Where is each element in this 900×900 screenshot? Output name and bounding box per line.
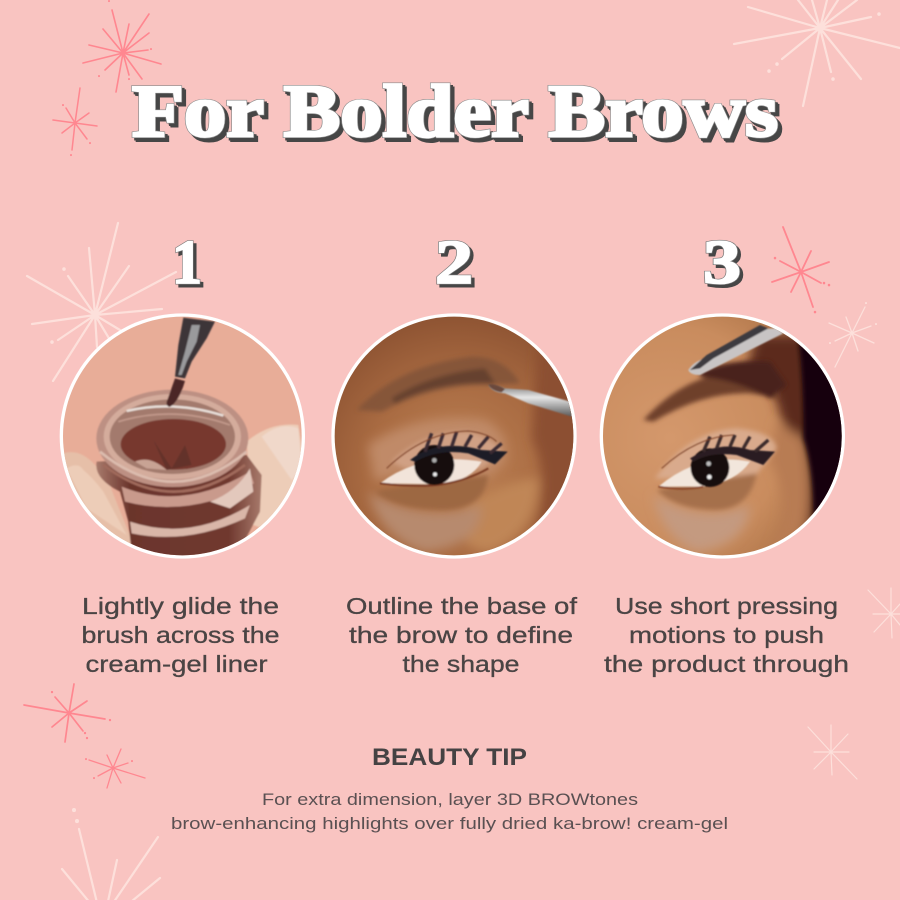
photo 1: brush dipping in jar	[60, 313, 305, 559]
starburst: pale bottom left	[62, 810, 160, 900]
step 3 caption: Use short pressing	[615, 593, 838, 619]
step 3 caption	[604, 593, 849, 677]
step number 2: 2	[438, 232, 476, 300]
step 3 caption: motions to push	[629, 622, 824, 648]
starburst: pale large left	[27, 223, 176, 381]
starburst: coral small lower left	[86, 749, 145, 788]
step number 2: 2	[435, 229, 473, 297]
starburst: pale top right	[734, 0, 900, 106]
step number 1: 1	[175, 232, 205, 300]
step 1 caption: brush across the	[82, 622, 280, 648]
step number 1: 1	[172, 229, 202, 297]
step 2 caption: the shape	[402, 651, 520, 677]
starburst: pale small right	[829, 303, 876, 367]
step number 3: 3	[703, 229, 741, 297]
title: For Bolder Brows	[132, 71, 778, 153]
title: For Bolder Brows	[134, 74, 780, 156]
starburst: pale lower right	[808, 725, 857, 779]
photo 3: pressing motions on brow	[600, 313, 845, 559]
step 1 caption: Lightly glide the	[82, 593, 279, 619]
step 1 caption: cream-gel liner	[86, 651, 268, 677]
step number 1: 1	[172, 229, 202, 297]
step 2 caption	[346, 593, 578, 677]
step number 2: 2	[435, 229, 473, 297]
beauty tip text: For extra dimension, layer 3D BROWtones	[262, 791, 638, 809]
step number 3: 3	[706, 232, 744, 300]
step number 3: 3	[703, 229, 741, 297]
step 2 caption: the brow to define	[349, 622, 573, 648]
beauty tip heading: BEAUTY TIP	[372, 744, 527, 771]
beauty tip text	[171, 791, 728, 833]
starburst: pale right edge	[868, 588, 900, 638]
starburst: coral lower left	[24, 684, 110, 742]
step 3 caption: the product through	[604, 651, 849, 677]
step 2 caption: Outline the base of	[346, 593, 578, 619]
photo 2: outlining brow	[331, 313, 577, 559]
starburst: coral small left	[53, 88, 97, 155]
step 1 caption	[82, 593, 280, 677]
beauty tip text: brow-enhancing highlights over fully dried ka-brow! cream-gel	[171, 815, 728, 833]
title: For Bolder Brows	[132, 71, 778, 153]
title: For Bolder Brows	[136, 75, 782, 157]
starburst: coral top left	[83, 1, 161, 92]
starburst: coral right	[772, 227, 829, 312]
